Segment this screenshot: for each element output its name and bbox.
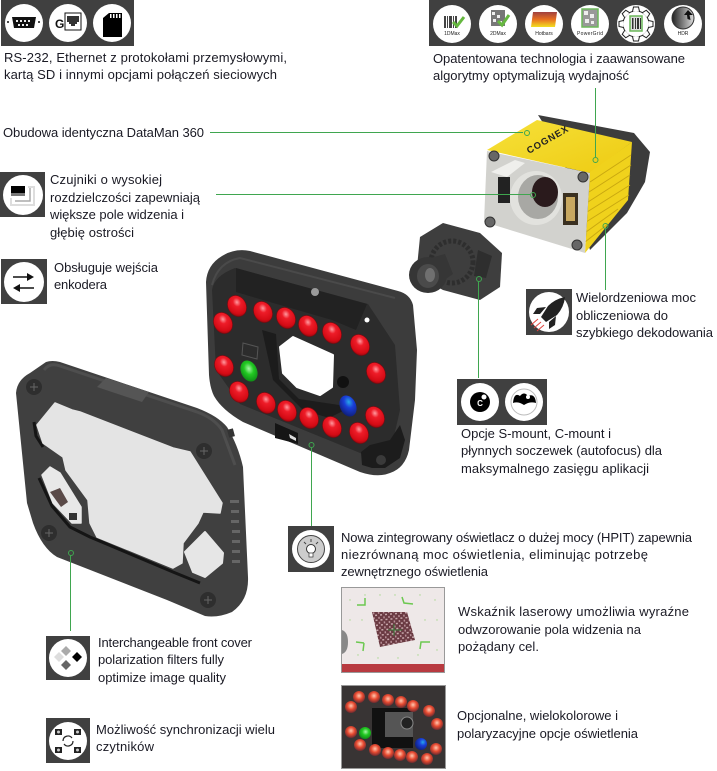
- text: laser aimer: Wskaźnik laserowy umożliwia wyraźne: [458, 604, 689, 619]
- icon strip: algorithms: PowerGrid: [577, 31, 603, 37]
- front cover: [16, 361, 248, 616]
- text: sensor: Czujniki o wysokiej: [50, 172, 162, 187]
- text: sensor: większe pole widzenia i: [49, 207, 184, 222]
- icon strip: algorithms: 2DMax: [490, 31, 506, 37]
- text: illuminator: zewnętrznego oświetlenia: [341, 564, 489, 579]
- icon strip: algorithms: 1DMax: [444, 31, 460, 37]
- text: multicore: Wielordzeniowa moc: [576, 290, 696, 305]
- icons: lens options: [457, 379, 547, 425]
- leader line: housing: [210, 130, 530, 136]
- text: illuminator: Nowa zintegrowany oświetlacz o dużej mocy (HPIT) zapewnia: [341, 530, 693, 545]
- text: polarization filters: polarization filters fully: [98, 652, 224, 667]
- text: illuminator: niezrównaną moc oświetlenia, eliminując potrzebę: [341, 547, 648, 562]
- text: algorithms: [433, 51, 685, 83]
- leader line: front cover: [68, 550, 74, 631]
- text: encoder: [54, 260, 159, 292]
- text: lens options: płynnych soczewek (autofocus) dla: [461, 443, 663, 458]
- text: multicore: szybkiego dekodowania: [576, 325, 714, 340]
- text: laser aimer: odwzorowanie pola widzenia na: [458, 622, 642, 637]
- text: sensor: rozdzielczości zapewniają: [50, 190, 201, 205]
- icon strip: connectivity: [1, 0, 134, 46]
- lens module: [409, 223, 502, 300]
- text: connectivity: [4, 50, 287, 82]
- text: connectivity: RS-232, Ethernet z protokołami przemysłowymi,: [4, 50, 287, 65]
- text: multicore: obliczeniowa do: [576, 308, 668, 323]
- text: encoder: enkodera: [54, 277, 108, 292]
- text: algorithms: Opatentowana technologia i zaawansowane: [433, 51, 685, 66]
- icon: polarization filters: [46, 636, 90, 680]
- text: lens options: maksymalnego zasięgu aplikacji: [461, 461, 649, 476]
- text: sensor: [49, 172, 201, 240]
- text: laser aimer: pożądany cel.: [458, 639, 539, 654]
- text: sync: czytników: [96, 739, 155, 754]
- leader line: sensor: [216, 192, 536, 198]
- leader line: lens: [476, 276, 482, 378]
- text: lens options: Opcje S-mount, C-mount i: [461, 426, 611, 441]
- text: polarization filters: Interchangeable front cover: [98, 635, 253, 650]
- leader line: illuminator: [309, 442, 314, 526]
- photo: multicolour LEDs: [342, 686, 446, 768]
- text: sync: Możliwość synchronizacji wielu: [96, 722, 275, 737]
- leader line: multicore: [603, 224, 608, 290]
- text: housing: Obudowa identyczna DataMan 360: [3, 125, 204, 140]
- icon: sync: [46, 718, 90, 763]
- text: multicolour LEDs: Opcjonalne, wielokolorowe i: [457, 708, 618, 723]
- icons: lens options: C: [477, 399, 483, 408]
- icon: rocket: [526, 289, 572, 335]
- icon: encoder arrows: [1, 259, 47, 304]
- LED board: [206, 250, 417, 475]
- icon: light bulb: [288, 526, 334, 572]
- text: lens options: [461, 426, 663, 476]
- text: algorithms: algorytmy optymalizują wydajność: [433, 68, 630, 83]
- leader line: algorithms: [593, 88, 598, 162]
- text: sync: [96, 722, 275, 754]
- icon: sensor: [0, 172, 45, 217]
- text: polarization filters: [98, 635, 253, 685]
- text: multicolour LEDs: polaryzacyjne opcje oświetlenia: [457, 726, 639, 741]
- photo: laser aimer: [342, 588, 444, 672]
- text: laser aimer: [458, 604, 689, 654]
- camera body: [484, 115, 650, 253]
- text: illuminator: [341, 530, 693, 579]
- text: encoder: Obsługuje wejścia: [54, 260, 159, 275]
- text: polarization filters: optimize image quality: [98, 670, 226, 685]
- icon strip: algorithms: [429, 0, 705, 46]
- text: multicore: [576, 290, 714, 340]
- icon strip: algorithms: HDR: [678, 31, 689, 37]
- text: multicolour LEDs: [457, 708, 639, 741]
- text: sensor: głębię ostrości: [50, 225, 134, 240]
- brand name: COGNEX: [525, 124, 571, 157]
- text: connectivity: kartą SD i innymi opcjami połączeń sieciowych: [4, 67, 277, 82]
- icon strip: algorithms: Hotbars: [535, 31, 553, 37]
- icon strip: connectivity: G: [55, 17, 64, 31]
